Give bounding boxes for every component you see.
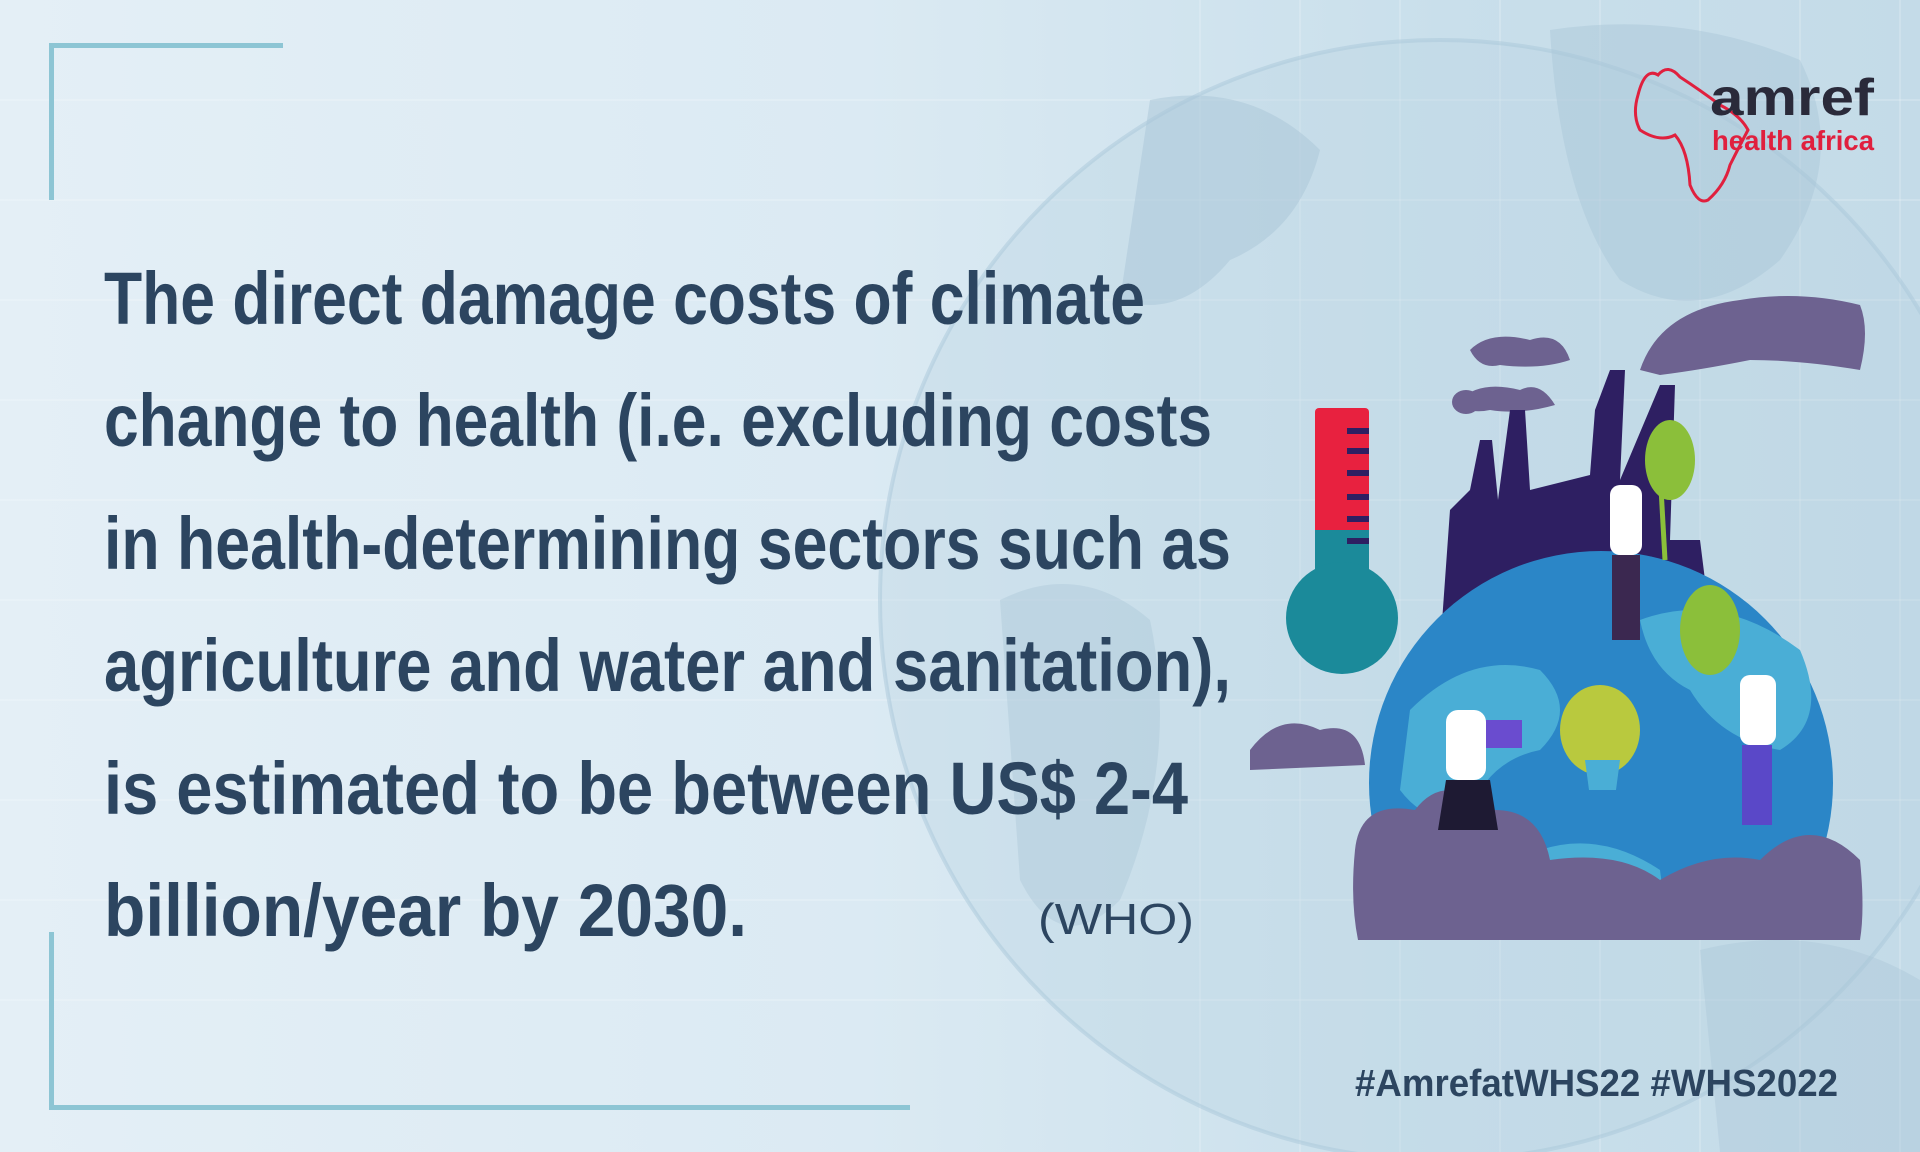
factory <box>1440 370 1710 650</box>
icon: Africa outline <box>1635 69 1748 201</box>
main statement text <box>104 257 1231 952</box>
logo: amref health africa <box>1634 68 1875 202</box>
bottom clouds <box>1353 790 1862 940</box>
illustration: climate change globe <box>1250 296 1865 940</box>
logo: amref health africa: amref <box>1710 69 1875 127</box>
hashtags: #AmrefatWHS22 #WHS2022 <box>1355 1063 1838 1105</box>
frame bracket: bottom-left <box>49 932 910 1110</box>
people and plants <box>1438 420 1776 830</box>
thermometer <box>1286 408 1398 674</box>
globe <box>1369 551 1833 880</box>
logo: amref health africa: health africa <box>1712 125 1874 156</box>
main statement text: billion/year by 2030. <box>104 869 747 952</box>
smoke clouds <box>1452 296 1865 414</box>
frame bracket: top-left <box>49 43 283 200</box>
source: (WHO) <box>1038 895 1194 944</box>
